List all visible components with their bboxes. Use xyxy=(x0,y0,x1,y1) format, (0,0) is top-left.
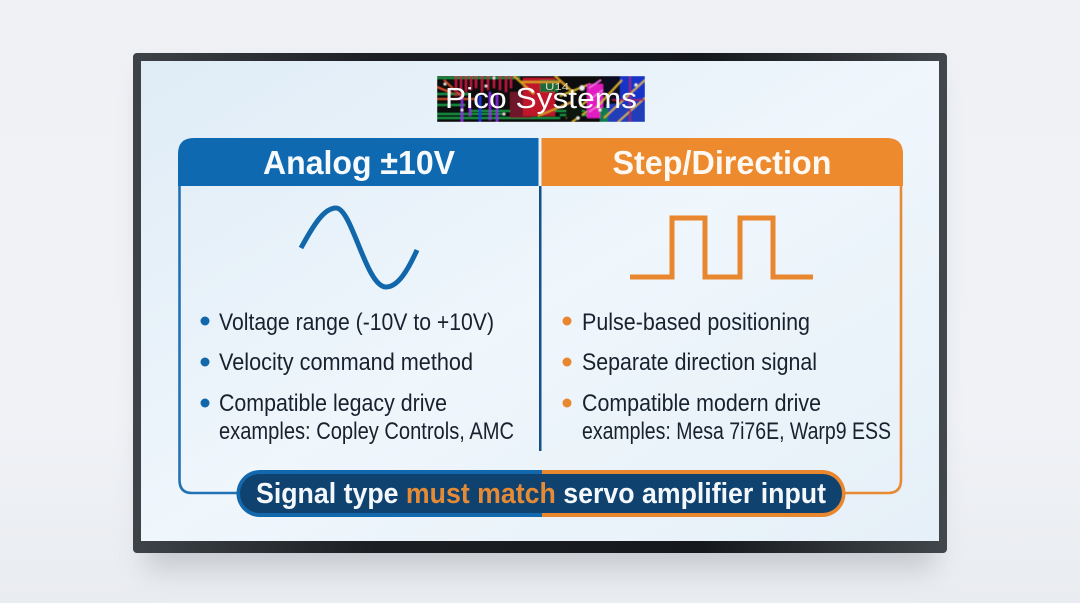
bullet list: analog: Compatible legacy drive xyxy=(219,390,447,417)
bullet list: step: Separate direction signal xyxy=(582,349,817,376)
panel: Step/Direction xyxy=(542,138,903,493)
callout: signal type must match: Signal type must match servo amplifier input xyxy=(256,478,826,510)
icon: square pulse wave xyxy=(630,218,813,277)
bullet list: step: examples: Mesa 7i76E, Warp9 ESS xyxy=(582,418,891,445)
bullet list: analog: examples: Copley Controls, AMC xyxy=(219,418,514,445)
panel: Analog ±10V xyxy=(178,138,538,493)
bullet list: analog: Velocity command method xyxy=(219,349,473,376)
bullet list: step: Compatible modern drive xyxy=(582,390,821,417)
bullet list: analog: Voltage range (-10V to +10V) xyxy=(219,309,494,336)
bullet list: step: Pulse-based positioning xyxy=(582,309,810,336)
logo: Pico Systems xyxy=(437,76,645,122)
header: Analog ±10V: Analog ±10V xyxy=(263,144,455,181)
logo: Pico Systems: U14 xyxy=(545,82,570,93)
panel outline: step xyxy=(842,180,901,493)
bullet list: analog xyxy=(200,309,514,445)
header: Analog ±10V xyxy=(178,138,538,186)
monitor xyxy=(133,53,947,570)
icon: sine wave xyxy=(301,208,417,287)
bullet list: step xyxy=(562,309,891,445)
header: Step/Direction: Step/Direction xyxy=(612,144,832,181)
logo: Pico Systems: Pico Systems xyxy=(445,83,637,115)
header: Step/Direction xyxy=(542,138,903,186)
panel outline: analog xyxy=(180,180,240,493)
center divider xyxy=(539,186,542,451)
callout: signal type must match xyxy=(236,470,845,517)
